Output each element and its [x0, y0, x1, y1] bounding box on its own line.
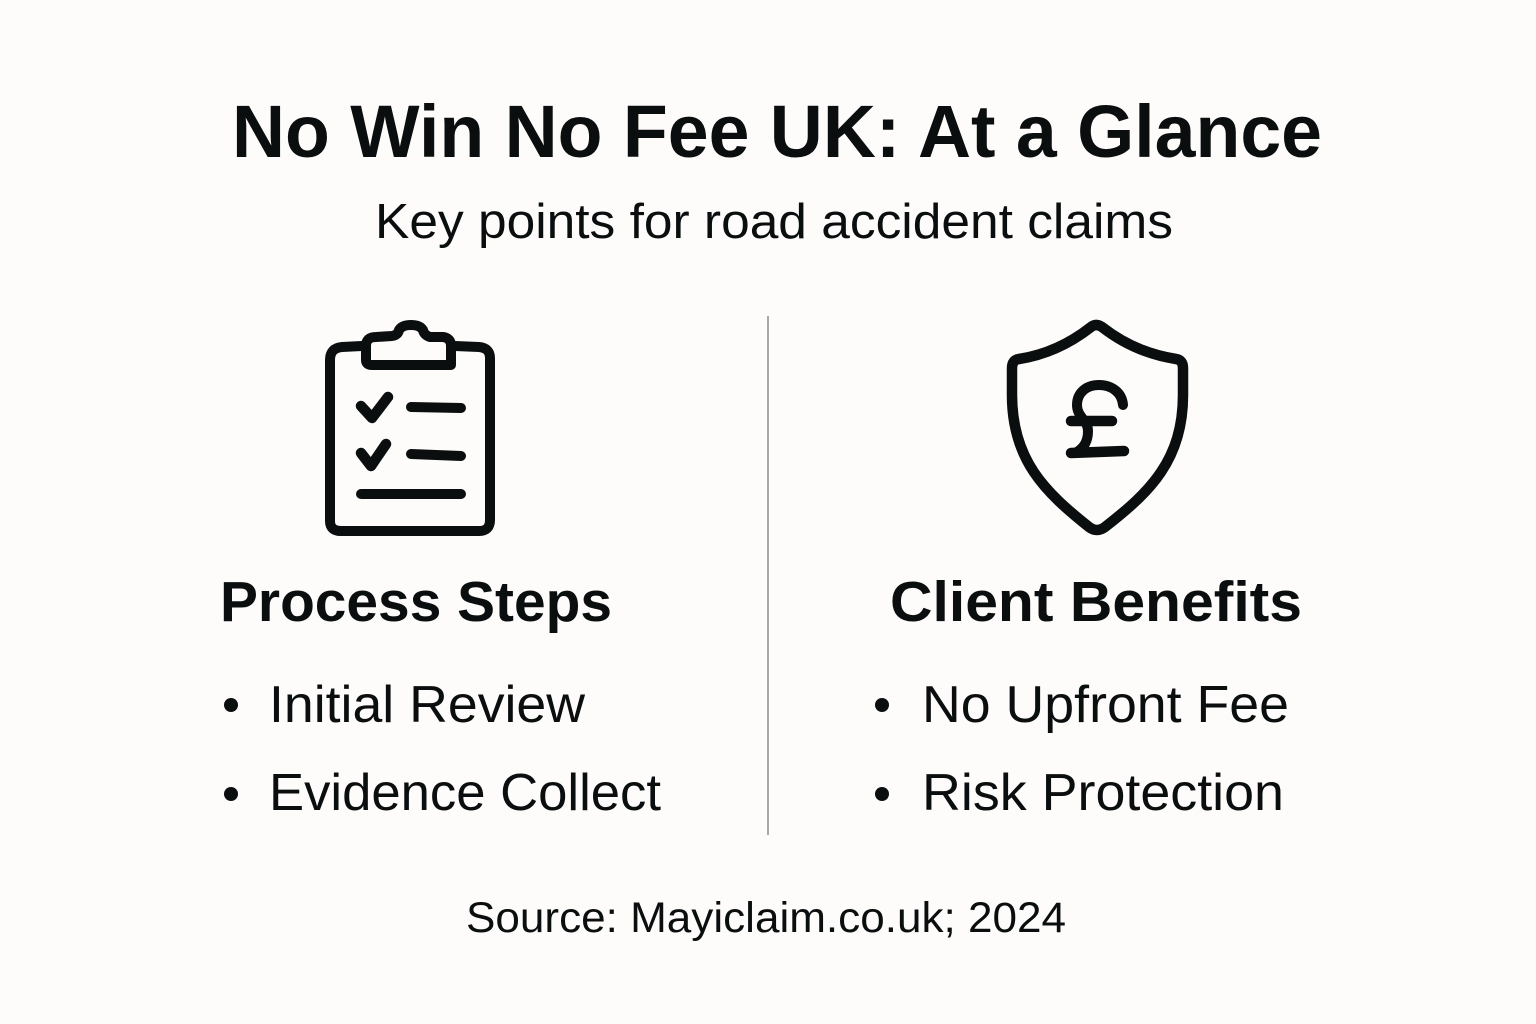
title: No Win No Fee UK: At a Glance: [232, 90, 1322, 173]
heading: client benefits: Client Benefits: [890, 570, 1302, 634]
list: client benefits: Risk Protection: [922, 764, 1284, 822]
list: process steps: [224, 676, 662, 822]
list: client benefits: No Upfront Fee: [922, 676, 1289, 734]
heading: process steps: Process Steps: [220, 570, 612, 634]
subtitle: Key points for road accident claims: [375, 195, 1173, 249]
list: process steps: Initial Review: [269, 676, 585, 734]
panel: client benefits: [875, 325, 1302, 822]
source note: Source: Mayiclaim.co.uk; 2024: [466, 894, 1066, 942]
list: process steps: Evidence Collect: [269, 764, 662, 822]
pound sign: [1071, 385, 1124, 453]
panel: process steps: [220, 325, 662, 822]
icon: clipboard checklist: [330, 325, 490, 531]
list: client benefits: [875, 676, 1289, 822]
icon: shield with pound: [1012, 325, 1183, 530]
